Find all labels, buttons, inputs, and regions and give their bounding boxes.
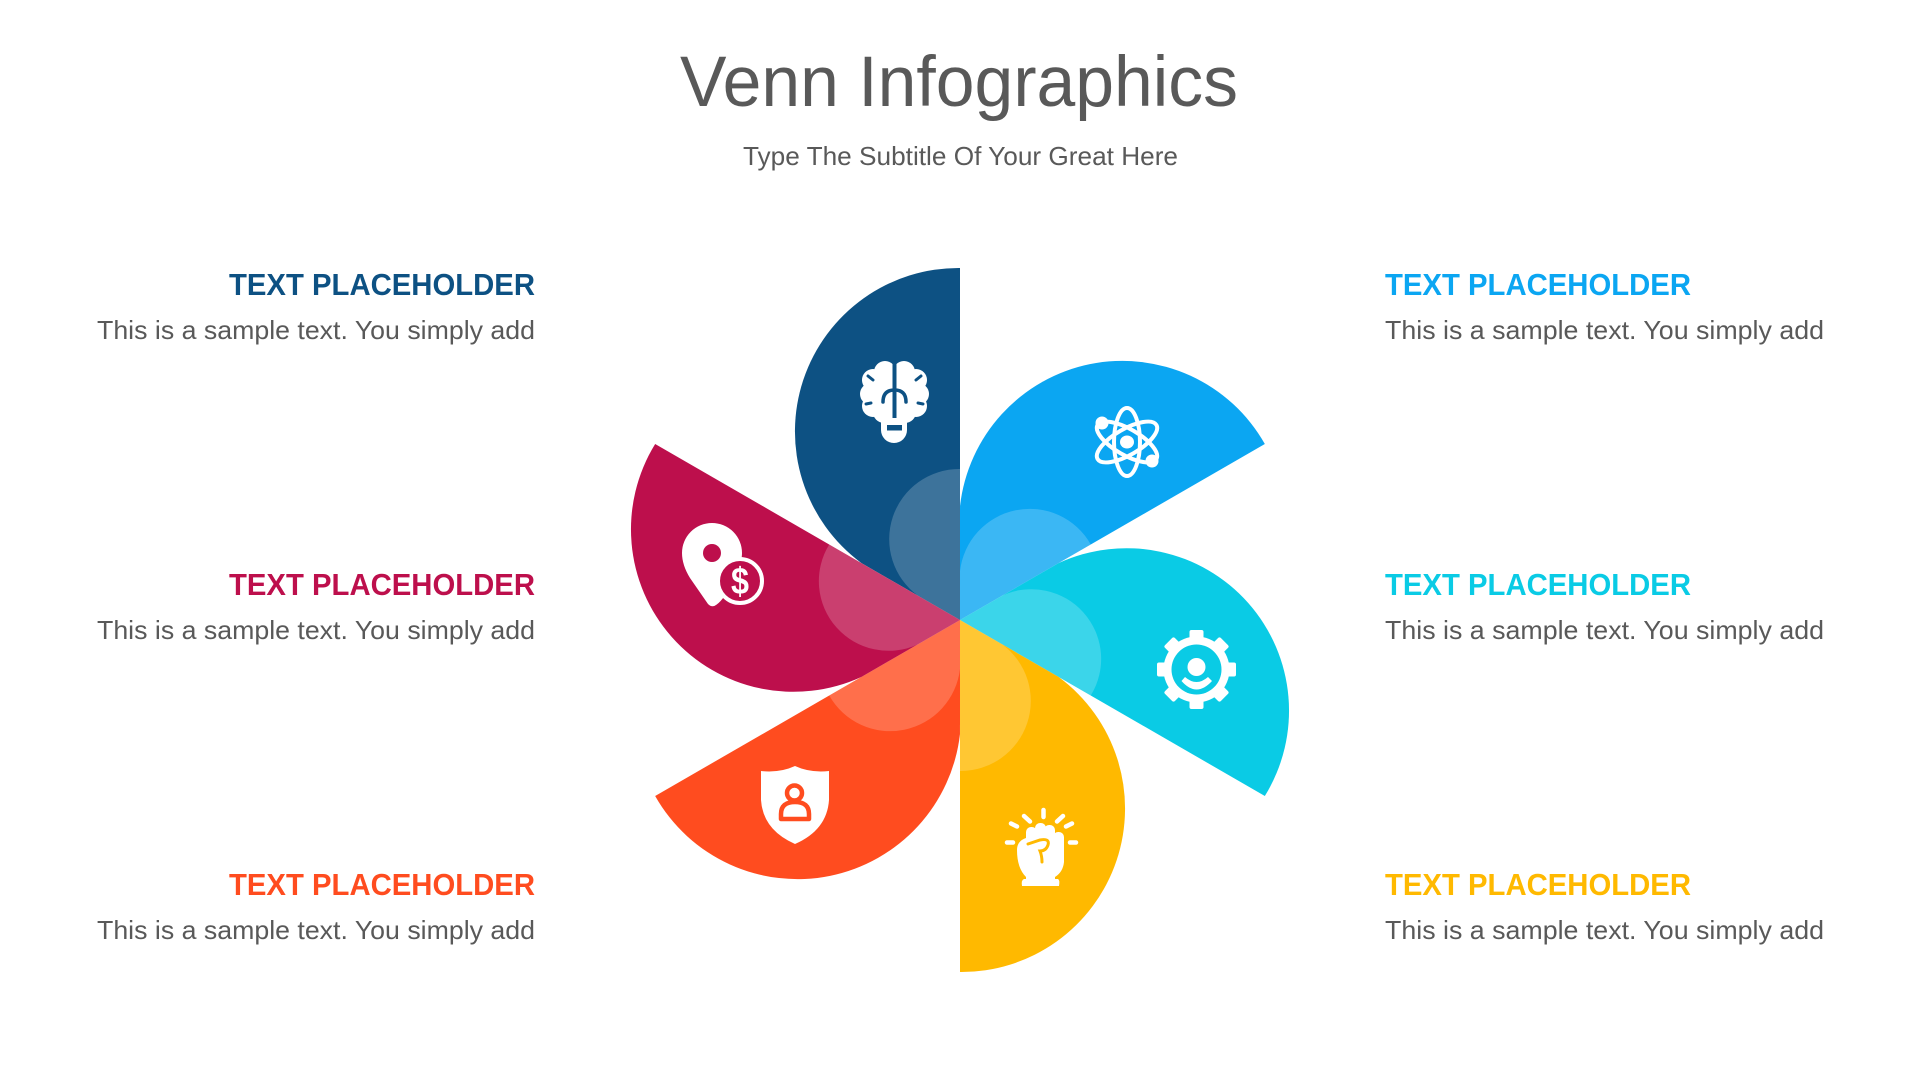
petal: red	[655, 620, 1043, 939]
petal: sky blue	[877, 301, 1265, 620]
heading: TEXT PLACEHOLDER	[1385, 267, 1691, 302]
text block: sky blue right top	[1385, 267, 1824, 345]
body text: This is a sample text. You simply add	[1385, 315, 1824, 345]
heading: TEXT PLACEHOLDER	[1385, 567, 1691, 602]
icon: fist with rays	[1007, 810, 1076, 886]
icon: gear with person	[1157, 630, 1236, 709]
petal: yellow	[960, 620, 1125, 972]
petal: navy	[795, 268, 960, 620]
body text: This is a sample text. You simply add	[97, 615, 535, 645]
petal: cyan	[960, 475, 1349, 796]
body text: This is a sample text. You simply add	[97, 315, 535, 345]
body text: This is a sample text. You simply add	[1385, 915, 1824, 945]
text block: cyan right middle	[1385, 567, 1824, 645]
text block: navy left top	[97, 267, 535, 345]
petal: magenta	[571, 444, 960, 765]
body text: This is a sample text. You simply add	[1385, 615, 1824, 645]
text block: magenta left middle	[97, 567, 535, 645]
icon: shield with person	[761, 766, 829, 844]
body text: This is a sample text. You simply add	[97, 915, 535, 945]
icon: atom	[1091, 408, 1163, 476]
pinwheel venn diagram	[571, 268, 1349, 972]
icon: location pin with dollar	[682, 523, 762, 606]
title: Venn Infographics	[680, 43, 1238, 122]
heading: TEXT PLACEHOLDER	[229, 267, 535, 302]
icon: location pin with dollar: $	[731, 561, 749, 603]
subtitle: Type The Subtitle Of Your Great Here	[743, 141, 1178, 171]
icon: brain bulb	[860, 361, 929, 443]
text block: yellow right bottom	[1385, 867, 1824, 945]
text block: red left bottom	[97, 867, 535, 945]
heading: TEXT PLACEHOLDER	[229, 867, 535, 902]
heading: TEXT PLACEHOLDER	[229, 567, 535, 602]
heading: TEXT PLACEHOLDER	[1385, 867, 1691, 902]
